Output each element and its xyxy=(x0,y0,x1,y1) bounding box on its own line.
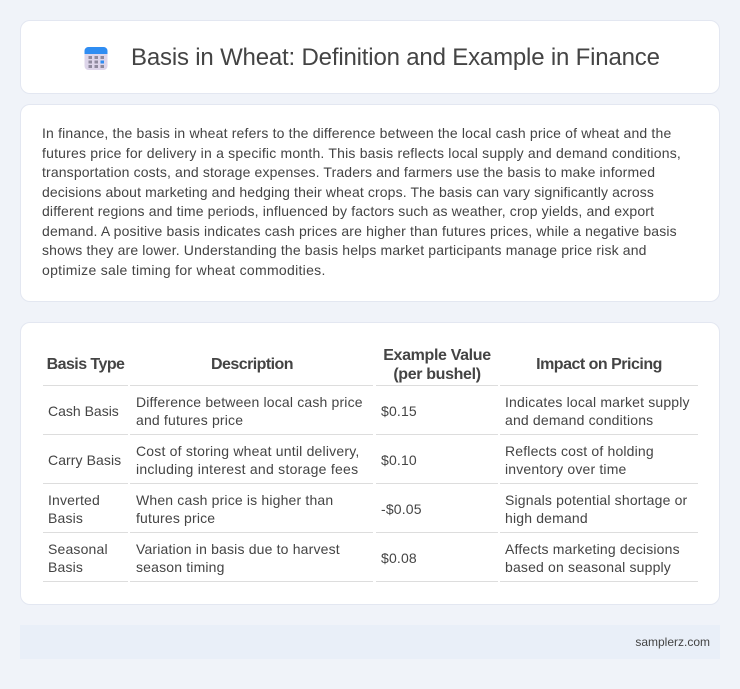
row: cash basis xyxy=(48,394,690,428)
intro paragraph: shows they are lower. Understanding the basis helps market participants manage price risk and xyxy=(42,242,647,258)
row: cash basis: and demand conditions xyxy=(505,412,653,428)
table header: (per bushel) xyxy=(393,366,481,383)
table header: Basis Type xyxy=(47,356,124,373)
intro paragraph: demand. A positive basis indicates cash prices are higher than futures prices, while a negative basis xyxy=(42,222,677,238)
footer text: samplerz.com xyxy=(635,635,710,649)
icon: calendar xyxy=(84,47,108,70)
row: inverted basis xyxy=(48,492,687,526)
intro paragraph: transportation costs, and storage expenses. Traders and farmers use the basis to make informed xyxy=(42,164,655,180)
panel: title card xyxy=(20,20,720,94)
row: cash basis: Difference between local cash price xyxy=(136,394,363,410)
title: Basis in Wheat: Definition and Example in Finance xyxy=(131,44,660,71)
row: inverted basis: When cash price is higher than xyxy=(136,492,333,508)
row: seasonal basis: Seasonal xyxy=(48,541,108,557)
intro paragraph: optimize sale timing for wheat commodities. xyxy=(42,262,326,278)
intro paragraph: futures price for delivery in a specific month. This basis reflects local supply and demand conditions, xyxy=(42,144,681,160)
intro paragraph: decisions about marketing and hedging their wheat crops. The basis can vary significantly across xyxy=(42,184,654,200)
row: cash basis: $0.15 xyxy=(381,403,417,419)
panel: intro text card xyxy=(20,104,720,302)
row: inverted basis: Signals potential shortage or xyxy=(505,492,687,508)
row: seasonal basis: $0.08 xyxy=(381,550,417,566)
row: seasonal basis: Basis xyxy=(48,559,83,575)
row: carry basis: Reflects cost of holding xyxy=(505,443,654,459)
row: cash basis: and futures price xyxy=(136,412,243,428)
row: seasonal basis xyxy=(48,541,680,575)
row: carry basis: $0.10 xyxy=(381,452,417,468)
table header: Description xyxy=(211,356,293,373)
intro paragraph: different regions and time periods, influenced by factors such as weather, crop yields, and export xyxy=(42,203,654,219)
row: cash basis: Indicates local market supply xyxy=(505,394,690,410)
row: carry basis xyxy=(48,443,654,477)
row: cash basis: Cash Basis xyxy=(48,403,119,419)
table header: Impact on Pricing xyxy=(536,356,662,373)
row: inverted basis: futures price xyxy=(136,510,215,526)
row: seasonal basis: Affects marketing decisions xyxy=(505,541,680,557)
intro paragraph: In finance, the basis in wheat refers to the difference between the local cash price of wheat and the xyxy=(42,125,671,141)
row: carry basis: including interest and storage fees xyxy=(136,461,358,477)
row: seasonal basis: season timing xyxy=(136,559,225,575)
table header: Example Value xyxy=(383,347,491,364)
row: carry basis: Cost of storing wheat until delivery, xyxy=(136,443,359,459)
table xyxy=(43,347,698,582)
panel: table card xyxy=(20,322,720,605)
row: inverted basis: high demand xyxy=(505,510,588,526)
footer bar xyxy=(20,625,720,659)
row: carry basis: Carry Basis xyxy=(48,452,121,468)
table header xyxy=(47,347,662,383)
row: carry basis: inventory over time xyxy=(505,461,626,477)
row: seasonal basis: Variation in basis due to harvest xyxy=(136,541,340,557)
intro paragraph xyxy=(42,125,681,278)
row: seasonal basis: based on seasonal supply xyxy=(505,559,671,575)
row: inverted basis: Inverted xyxy=(48,492,100,508)
row: inverted basis: Basis xyxy=(48,510,83,526)
row: inverted basis: -$0.05 xyxy=(381,501,422,517)
